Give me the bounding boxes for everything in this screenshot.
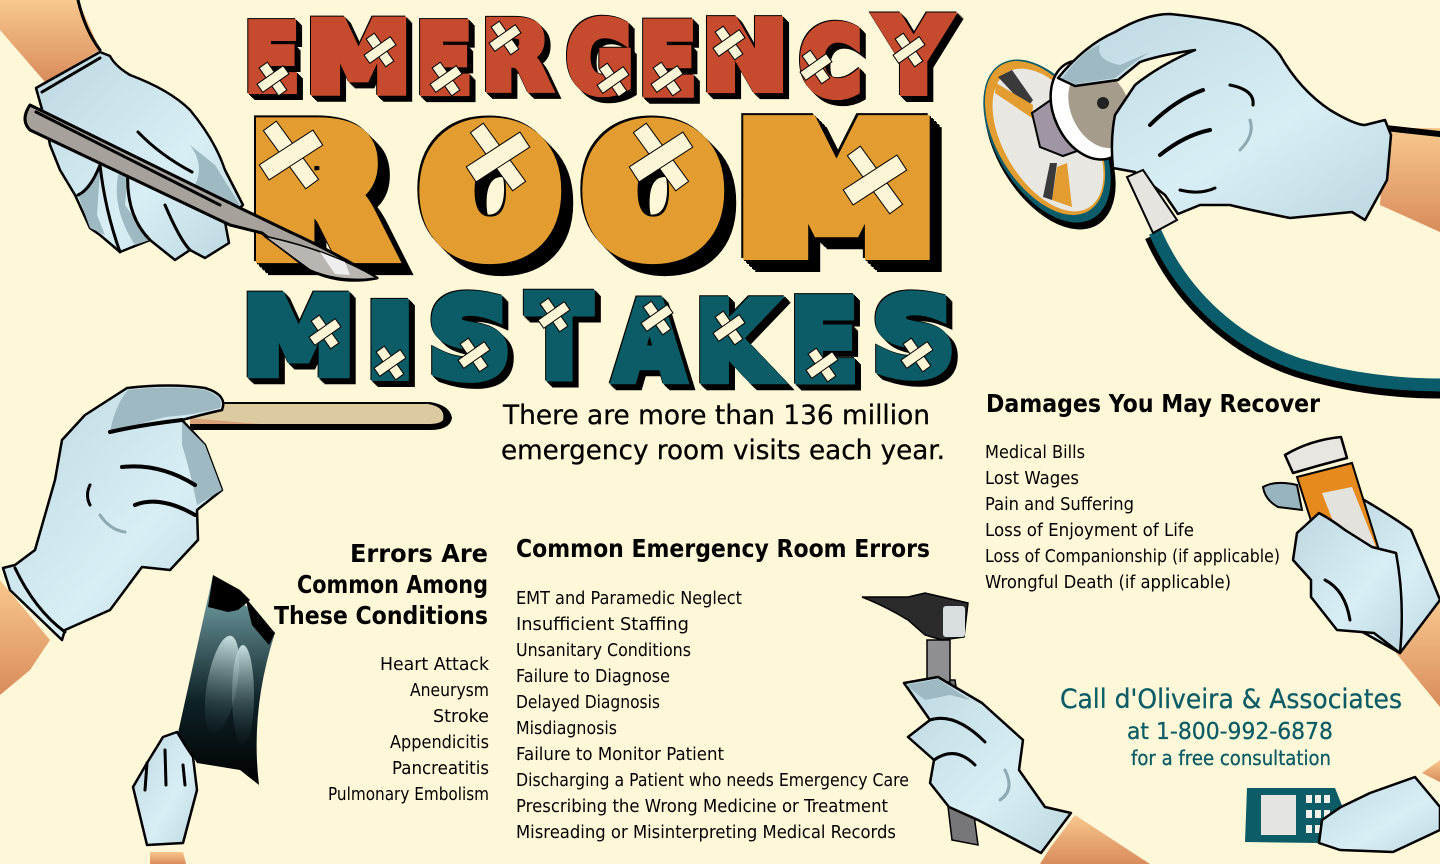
list: damages: Pain and Suffering [985, 494, 1134, 515]
list: common errors: EMT and Paramedic Neglect [516, 588, 742, 609]
list: damages: Loss of Companionship (if applicable) [985, 546, 1280, 567]
list: conditions: Stroke [433, 706, 489, 727]
title word: Mistakes: I [366, 285, 414, 400]
icon: gloved hand holding pill bottle [1263, 437, 1440, 707]
title word: Mistakes: M [243, 278, 354, 398]
intro statement: There are more than 136 million [502, 400, 930, 431]
stethoscope head [957, 38, 1145, 252]
list: conditions [328, 654, 490, 805]
heading: damages: Damages You May Recover [986, 389, 1321, 418]
heading: conditions: Errors Are [350, 539, 488, 568]
title word: Emergency [245, 0, 949, 116]
stethoscope tube [1152, 236, 1440, 391]
title word: Room: O [424, 101, 557, 287]
title word: Mistakes: E [791, 279, 857, 405]
list: conditions: Heart Attack [380, 654, 490, 675]
title word: Emergency: E [640, 5, 696, 115]
list: common errors: Delayed Diagnosis [516, 692, 660, 713]
panel: conditions [274, 539, 490, 805]
heading: conditions [274, 539, 488, 630]
call to action: at 1-800-992-6878 [1127, 719, 1333, 745]
icon: gloved hand holding tongue depressor [0, 386, 452, 695]
heading: common errors: Common Emergency Room Errors [516, 534, 930, 563]
list: conditions: Aneurysm [410, 680, 489, 701]
title word: Emergency: C [800, 7, 861, 116]
title: Emergency Room Mistakes [243, 0, 954, 405]
panel: damages [985, 389, 1321, 593]
title word: Emergency: Y [878, 0, 949, 116]
title word: Emergency: M [307, 3, 411, 114]
call to action: Call d'Oliveira & Associates [1060, 684, 1402, 715]
list: damages: Loss of Enjoyment of Life [985, 520, 1194, 541]
heading: conditions: Common Among [297, 570, 488, 599]
list: common errors: Unsanitary Conditions [516, 640, 691, 661]
list: common errors: Discharging a Patient who needs Emergency Care [516, 770, 909, 791]
icon: gloved hand holding stethoscope [957, 14, 1440, 391]
stethoscope connector [1127, 170, 1177, 233]
icon: gloved hand holding otoscope [862, 593, 1150, 864]
panel: common errors [516, 534, 930, 843]
list: damages: Wrongful Death (if applicable) [985, 572, 1231, 593]
title word: Emergency: R [482, 5, 550, 111]
list: conditions: Pancreatitis [392, 758, 489, 779]
title word: Room [254, 97, 932, 290]
list: damages: Medical Bills [985, 442, 1085, 463]
intro statement: emergency room visits each year. [501, 435, 945, 466]
title word: Mistakes: S [429, 276, 510, 402]
icon: gloved hand holding scalpel [0, 0, 377, 280]
tongue depressor [190, 402, 452, 430]
call to action [1060, 684, 1402, 770]
intro statement [501, 400, 945, 466]
icon: gloved hand holding phone [1245, 760, 1440, 852]
list: conditions: Appendicitis [390, 732, 489, 753]
list: common errors: Misdiagnosis [516, 718, 617, 739]
title word: Emergency: E [245, 5, 299, 111]
list: common errors: Insufficient Staffing [516, 614, 689, 635]
title word: Mistakes: S [873, 277, 954, 399]
title word: Mistakes: A [616, 281, 684, 404]
list: damages: Lost Wages [985, 468, 1079, 489]
title word: Room: R [254, 99, 383, 290]
phone [1245, 788, 1345, 843]
list: common errors: Misreading or Misinterpreting Medical Records [516, 822, 896, 843]
list: common errors: Failure to Monitor Patient [516, 744, 724, 765]
list: common errors: Failure to Diagnose [516, 666, 670, 687]
bandages on title letters [257, 21, 933, 382]
title word: Emergency: N [703, 2, 787, 110]
title word: Room: M [741, 97, 932, 286]
heading: conditions: These Conditions [274, 601, 488, 630]
icon: gloved hand holding x-ray film [133, 575, 275, 864]
list: conditions: Pulmonary Embolism [328, 784, 489, 805]
otoscope [862, 593, 978, 845]
list: damages [985, 442, 1280, 593]
title word: Emergency: E [417, 7, 471, 114]
title word: Mistakes: K [696, 281, 777, 405]
title word: Emergency: G [567, 2, 633, 114]
title word: Mistakes: T [528, 274, 591, 403]
title word: Room: O [587, 101, 720, 287]
call to action: for a free consultation [1131, 746, 1331, 770]
pill bottle [1285, 437, 1378, 580]
title word: Mistakes [243, 274, 954, 405]
list: common errors: Prescribing the Wrong Medicine or Treatment [516, 796, 888, 817]
list: common errors [516, 588, 909, 843]
